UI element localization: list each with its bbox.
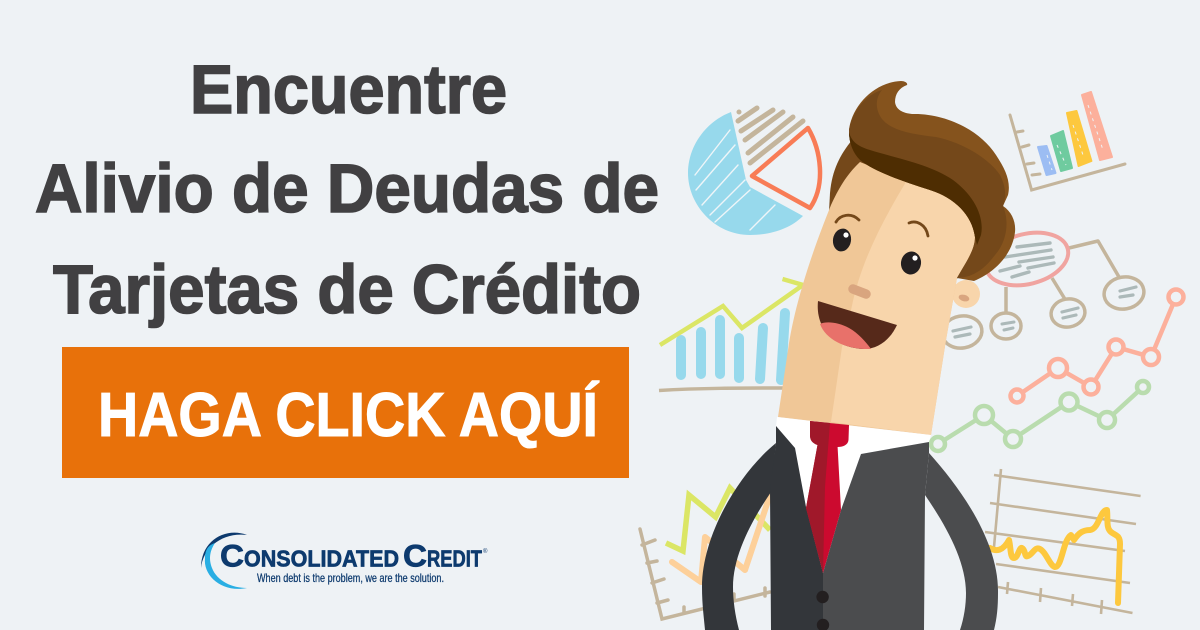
mind map diagram [940,225,1146,351]
logo: Consolidated Credit: REDIT [427,546,482,572]
collar [776,417,931,510]
suit left arm [702,443,776,630]
line chart: salmon [1010,290,1184,402]
face highlight [831,182,975,435]
logo: Consolidated Credit: ® [483,548,488,555]
character: businessman [702,81,1015,630]
eyes [831,227,923,276]
hair back [829,140,985,279]
bar and arrow chart: left of head [659,279,803,390]
eyebrows [836,215,928,236]
logo: Consolidated Credit: ONSOLIDATED [244,546,399,572]
suit left lapel [770,426,823,630]
line chart: bottom left [640,488,770,619]
nose [853,289,866,294]
hair [849,81,1015,281]
jacket buttons [816,591,829,630]
logo: Consolidated Credit: C [403,538,427,574]
pie chart [688,108,820,235]
ear [952,280,980,308]
title: Tarjetas de Crédito [53,251,641,328]
mouth [818,301,897,349]
title: Alivio de Deudas de [35,150,659,227]
hair dark band [849,132,982,245]
logo: Consolidated Credit: When debt is the problem, we are the solution. [257,571,444,585]
logo: Consolidated Credit: C [220,538,244,574]
call to action button [62,347,629,478]
suit right arm [925,453,998,630]
suit right lapel [823,442,929,630]
stock chart: bottom right [985,469,1141,614]
hair shade [849,90,1007,278]
bar chart: top right [1010,92,1125,190]
call to action button: HAGA CLICK AQUÍ [98,381,600,450]
logo: Consolidated Credit [201,533,488,589]
title [35,51,659,328]
necktie [806,421,849,573]
title: Encuentre [190,51,507,128]
face [778,162,975,435]
line chart: green [931,381,1149,451]
